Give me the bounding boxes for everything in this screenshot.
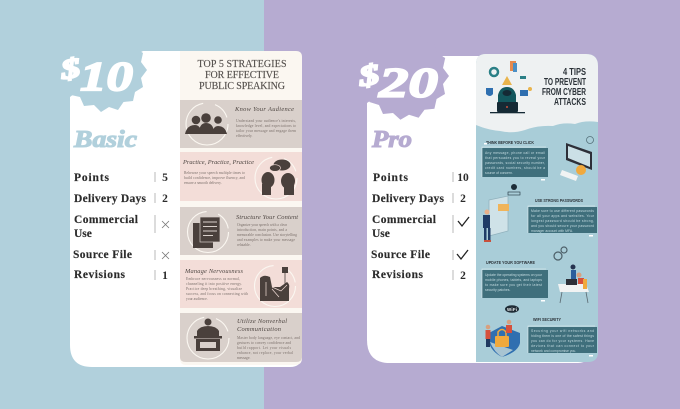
tip 3: update your software xyxy=(482,260,589,303)
strategy 3: structure your content: relatable. xyxy=(237,243,251,247)
strategy 4: manage nervousness: Manage Nervousness xyxy=(184,268,244,275)
strategy 1: know your audience xyxy=(180,100,302,148)
icon: gears xyxy=(554,247,567,260)
panel: basic plan card xyxy=(58,28,302,367)
feature list: pro: Revisions xyxy=(372,269,424,281)
strategy 2: practice: build confidence, improve fluency, and xyxy=(184,176,245,181)
strategy 5: nonverbal communication xyxy=(180,313,302,362)
tip 4: wifi security: you can do for your systems. Have xyxy=(531,339,594,343)
strategy 5: nonverbal communication: Utilize Nonverbal xyxy=(237,318,287,325)
strategy 3: structure your content: introduction, main points, and a xyxy=(237,228,287,233)
icon: armchair and lamp xyxy=(254,266,296,306)
tip 2: use strong passwords: for all your apps and websites. Your xyxy=(531,214,595,218)
icon: monitor with lock xyxy=(560,136,594,181)
tip 3: update your software: security patches. xyxy=(485,288,510,292)
feature list: pro: Use xyxy=(372,228,390,240)
tip 2: use strong passwords: Make sure to use different passwords xyxy=(531,209,594,213)
tip 1: think before you click: THINK BEFORE YOU CLICK xyxy=(486,140,535,145)
feature list: pro xyxy=(371,172,469,282)
tip 4: wifi security: network and compromise you. xyxy=(531,349,576,353)
panel: pro plan card xyxy=(356,32,598,363)
strategy 1: know your audience: effectively. xyxy=(236,134,252,138)
tip 2: use strong passwords xyxy=(483,196,597,242)
feature list: pro: Source File xyxy=(371,249,430,261)
feature list: basic: Commercial xyxy=(74,214,138,226)
tip 1: think before you click: that persuades you to reveal your xyxy=(485,156,546,160)
feature list: basic: Source File xyxy=(73,249,132,261)
tip 2: use strong passwords: longest password should be strong, xyxy=(531,219,594,223)
price badge: $20: 20 xyxy=(378,61,438,107)
tip 3: update your software: UPDATE YOUR SOFTWARE xyxy=(486,260,535,265)
strategy 4: manage nervousness: success, and focus on connecting with xyxy=(186,292,248,297)
strategy 5: nonverbal communication: message. xyxy=(237,356,250,360)
price badge: $10 xyxy=(58,28,147,112)
strategy 2: practice: Rehearse your speech multiple times to xyxy=(184,171,245,175)
icon: person at login screen xyxy=(483,196,509,242)
feature list: basic: Points xyxy=(74,172,110,184)
tip 1: think before you click: Any message, phone call or email xyxy=(485,151,545,155)
tip 3: update your software: mobile phones, tablets, and laptops xyxy=(485,278,542,282)
tip 4: wifi security xyxy=(486,317,597,357)
strategy 4: manage nervousness: Practice deep breathing, visualize xyxy=(186,287,242,292)
feature list: basic: 5 xyxy=(162,172,168,184)
tip 4: wifi security: hiding them is one of the safest things xyxy=(531,334,594,338)
strategy 5: nonverbal communication: Communication xyxy=(237,326,281,333)
feature list: pro: Points xyxy=(373,172,409,184)
price badge: $20: $ xyxy=(356,59,381,93)
feature list: basic: Delivery Days xyxy=(74,193,147,205)
feature list: pro: 10 xyxy=(457,172,469,184)
feature list: basic: Revisions xyxy=(74,269,126,281)
feature list: basic xyxy=(73,172,169,282)
strategy 3: structure your content: and examples to make your message xyxy=(237,238,295,242)
strategy 3: structure your content: Structure Your Content xyxy=(236,214,298,221)
strategy 4: manage nervousness xyxy=(180,260,302,308)
strategy 2: practice: ensure a smooth delivery. xyxy=(184,181,222,185)
price badge: $20 xyxy=(356,32,449,120)
icon: people at desk xyxy=(558,264,589,303)
strategy 5: nonverbal communication: enhance, not replace, your verbal xyxy=(237,351,293,356)
poster title: FOR EFFECTIVE xyxy=(205,70,279,81)
header title: TO PREVENT xyxy=(544,76,586,88)
price badge: $10: $ xyxy=(58,53,82,86)
strategy 5: nonverbal communication: gestures to convey confidence and xyxy=(237,341,291,345)
tip 2: use strong passwords: manager account with MFA. xyxy=(531,229,573,233)
tip 1: think before you click: passwords, social security number, xyxy=(485,161,545,165)
feature list: basic: 1 xyxy=(162,270,168,282)
tip 2: use strong passwords: USE STRONG PASSWORDS xyxy=(535,198,583,203)
feature list: basic: 2 xyxy=(162,193,168,205)
icon: shield and padlock xyxy=(486,320,520,357)
poster title: PUBLIC SPEAKING xyxy=(199,81,285,92)
feature list: pro: 2 xyxy=(460,270,466,282)
strategy 4: manage nervousness: channeling it into positive energy. xyxy=(186,282,242,286)
tip 4: wifi security: WIFI SECURITY xyxy=(533,317,561,322)
header title: FROM CYBER xyxy=(542,86,586,98)
icon: two heads talking xyxy=(255,157,297,199)
feature list: pro: 2 xyxy=(460,193,466,205)
strategy 4: manage nervousness: Embrace nervousness as normal, xyxy=(186,277,240,282)
strategy 3: structure your content xyxy=(180,207,302,255)
strategy 2: practice xyxy=(180,152,302,201)
strategy 3: structure your content: Organize your speech with a clear xyxy=(237,223,288,227)
header title: ATTACKS xyxy=(554,96,586,108)
plan name: Pro: Pro xyxy=(371,127,412,153)
icon: wifi: WiFi xyxy=(507,307,517,312)
price badge: $10: 10 xyxy=(80,53,133,99)
icon: documents xyxy=(188,212,228,252)
feature list: basic: Use xyxy=(74,228,92,240)
feature list: pro: Commercial xyxy=(372,214,436,226)
strategy 5: nonverbal communication: Master body language, eye contact, and xyxy=(237,336,300,341)
strategy 2: practice: Practice, Practice, Practice xyxy=(182,159,254,166)
strategy 1: know your audience: Understand your audience's interests, xyxy=(236,119,296,124)
poster: cyber attack tips xyxy=(476,54,598,362)
strategy 5: nonverbal communication: build rapport. Let your visuals xyxy=(237,346,292,350)
plan name: Basic: Basic xyxy=(73,127,137,153)
tip 1: think before you click xyxy=(482,136,594,181)
strategy 1: know your audience: Know Your Audience xyxy=(234,106,294,113)
header title: 4 TIPS xyxy=(563,66,586,78)
poster: public speaking strategies xyxy=(180,51,302,365)
strategy 1: know your audience: tailor your message and engage them xyxy=(236,129,296,133)
cloud header xyxy=(476,54,598,132)
header title xyxy=(542,66,586,108)
strategy 1: know your audience: knowledge level, and expectations to xyxy=(236,124,296,129)
strategy 4: manage nervousness: your audience. xyxy=(186,297,208,301)
poster title xyxy=(198,59,286,92)
icon: speaker at podium xyxy=(187,317,229,359)
tip 4: wifi security: devices that can connect to your xyxy=(531,344,595,348)
tip 1: think before you click: credit card numbers, should be a xyxy=(485,166,545,170)
strategy 3: structure your content: memorable conclusion. Use storytelling xyxy=(237,233,297,237)
poster title: TOP 5 STRATEGIES xyxy=(198,59,286,70)
tip 4: wifi security: Securing your wifi networks and xyxy=(531,329,594,333)
tip 1: think before you click: source of concern. xyxy=(485,171,513,175)
feature list: pro: Delivery Days xyxy=(372,193,445,205)
icon: wifi xyxy=(505,305,519,313)
tip 2: use strong passwords: and you should secure your password xyxy=(531,224,594,228)
icon: hacker at laptop xyxy=(486,61,532,113)
icon: password dots xyxy=(508,184,520,195)
tip 3: update your software: Update the operating systems on your xyxy=(485,273,543,277)
tip 3: update your software: to make sure you get their latest xyxy=(485,283,542,287)
icon: audience xyxy=(185,103,228,145)
